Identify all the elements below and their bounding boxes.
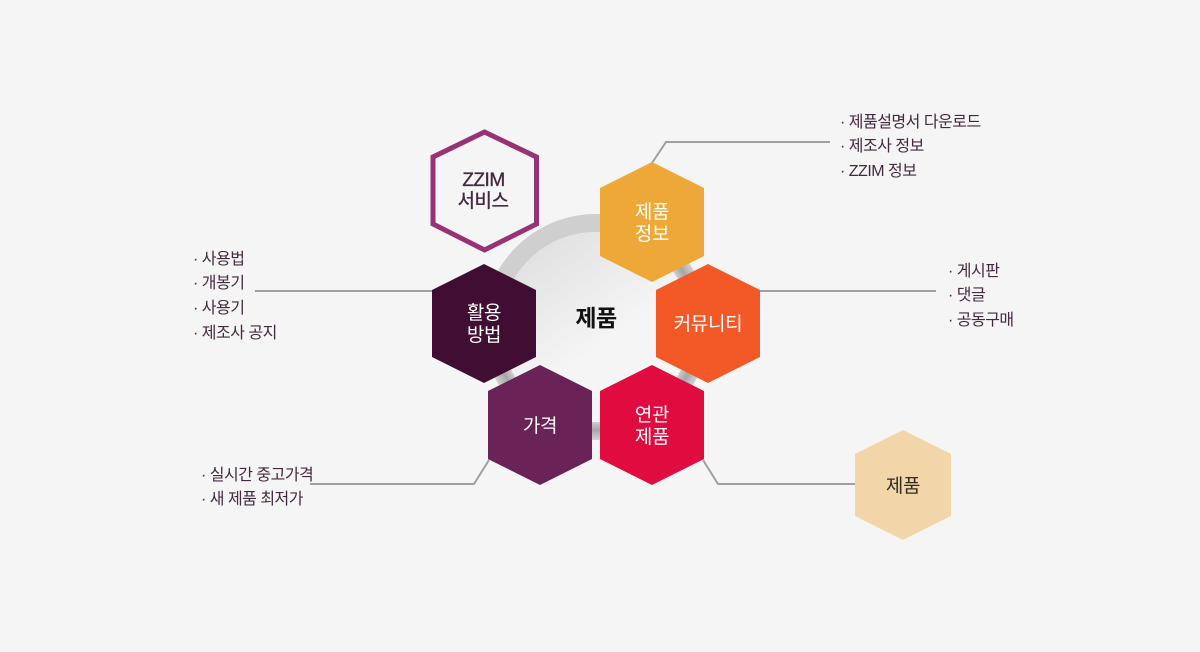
list: 커뮤니티: · 댓글 (948, 286, 985, 304)
hexagon: 연관 제품: 제품 (635, 426, 669, 448)
central disc (501, 232, 691, 422)
list: 가격: · 실시간 중고가격 (201, 466, 313, 484)
list: 가격 (201, 466, 313, 508)
list: 제품 정보: · 제품설명서 다운로드 (840, 113, 981, 131)
list: 제품 정보: · ZZIM 정보 (840, 162, 916, 180)
list: 커뮤니티: · 게시판 (948, 262, 1000, 280)
connector lines (255, 142, 936, 484)
hexagon: ZZIM 서비스: ZZIM (462, 170, 505, 191)
hexagon: 제품 정보: 정보 (635, 223, 669, 245)
hexagon: 제품 정보 (600, 162, 704, 282)
list: 가격: · 새 제품 최저가 (201, 490, 304, 508)
hexagon: 연관 제품 (600, 365, 704, 485)
hexagon: 가격 (488, 365, 592, 485)
hexagon: 제품 legend: 제품 (886, 475, 920, 497)
hexagon: 커뮤니티 (656, 264, 760, 383)
hexagon: 제품 정보: 제품 (635, 201, 669, 223)
hexagon: ZZIM 서비스 (433, 132, 536, 250)
list: 커뮤니티: · 공동구매 (948, 311, 1014, 329)
hexagon: 활용 방법: 활용 (467, 302, 501, 324)
hexagon: 활용 방법 (432, 264, 536, 383)
list: 활용 방법: · 개봉기 (193, 274, 244, 292)
list: 활용 방법: · 제조사 공지 (193, 324, 277, 342)
hexagon: 활용 방법: 방법 (467, 324, 501, 346)
list: 활용 방법: · 사용법 (193, 250, 244, 268)
hexagon: 제품 legend (855, 430, 951, 540)
list: 커뮤니티 (948, 262, 1014, 329)
list: 제품 정보: · 제조사 정보 (840, 137, 924, 155)
central ring (492, 223, 700, 431)
list: 제품 정보 (840, 113, 981, 180)
infographic (194, 114, 1012, 540)
list: 활용 방법: · 사용기 (193, 299, 244, 317)
hexagon: 연관 제품: 연관 (635, 404, 669, 426)
hexagon: 가격: 가격 (523, 415, 557, 437)
hexagon: ZZIM 서비스: 서비스 (458, 190, 508, 212)
center label: 제품 (575, 305, 617, 331)
hexagon: 커뮤니티: 커뮤니티 (674, 313, 742, 335)
list: 활용 방법 (193, 250, 277, 342)
